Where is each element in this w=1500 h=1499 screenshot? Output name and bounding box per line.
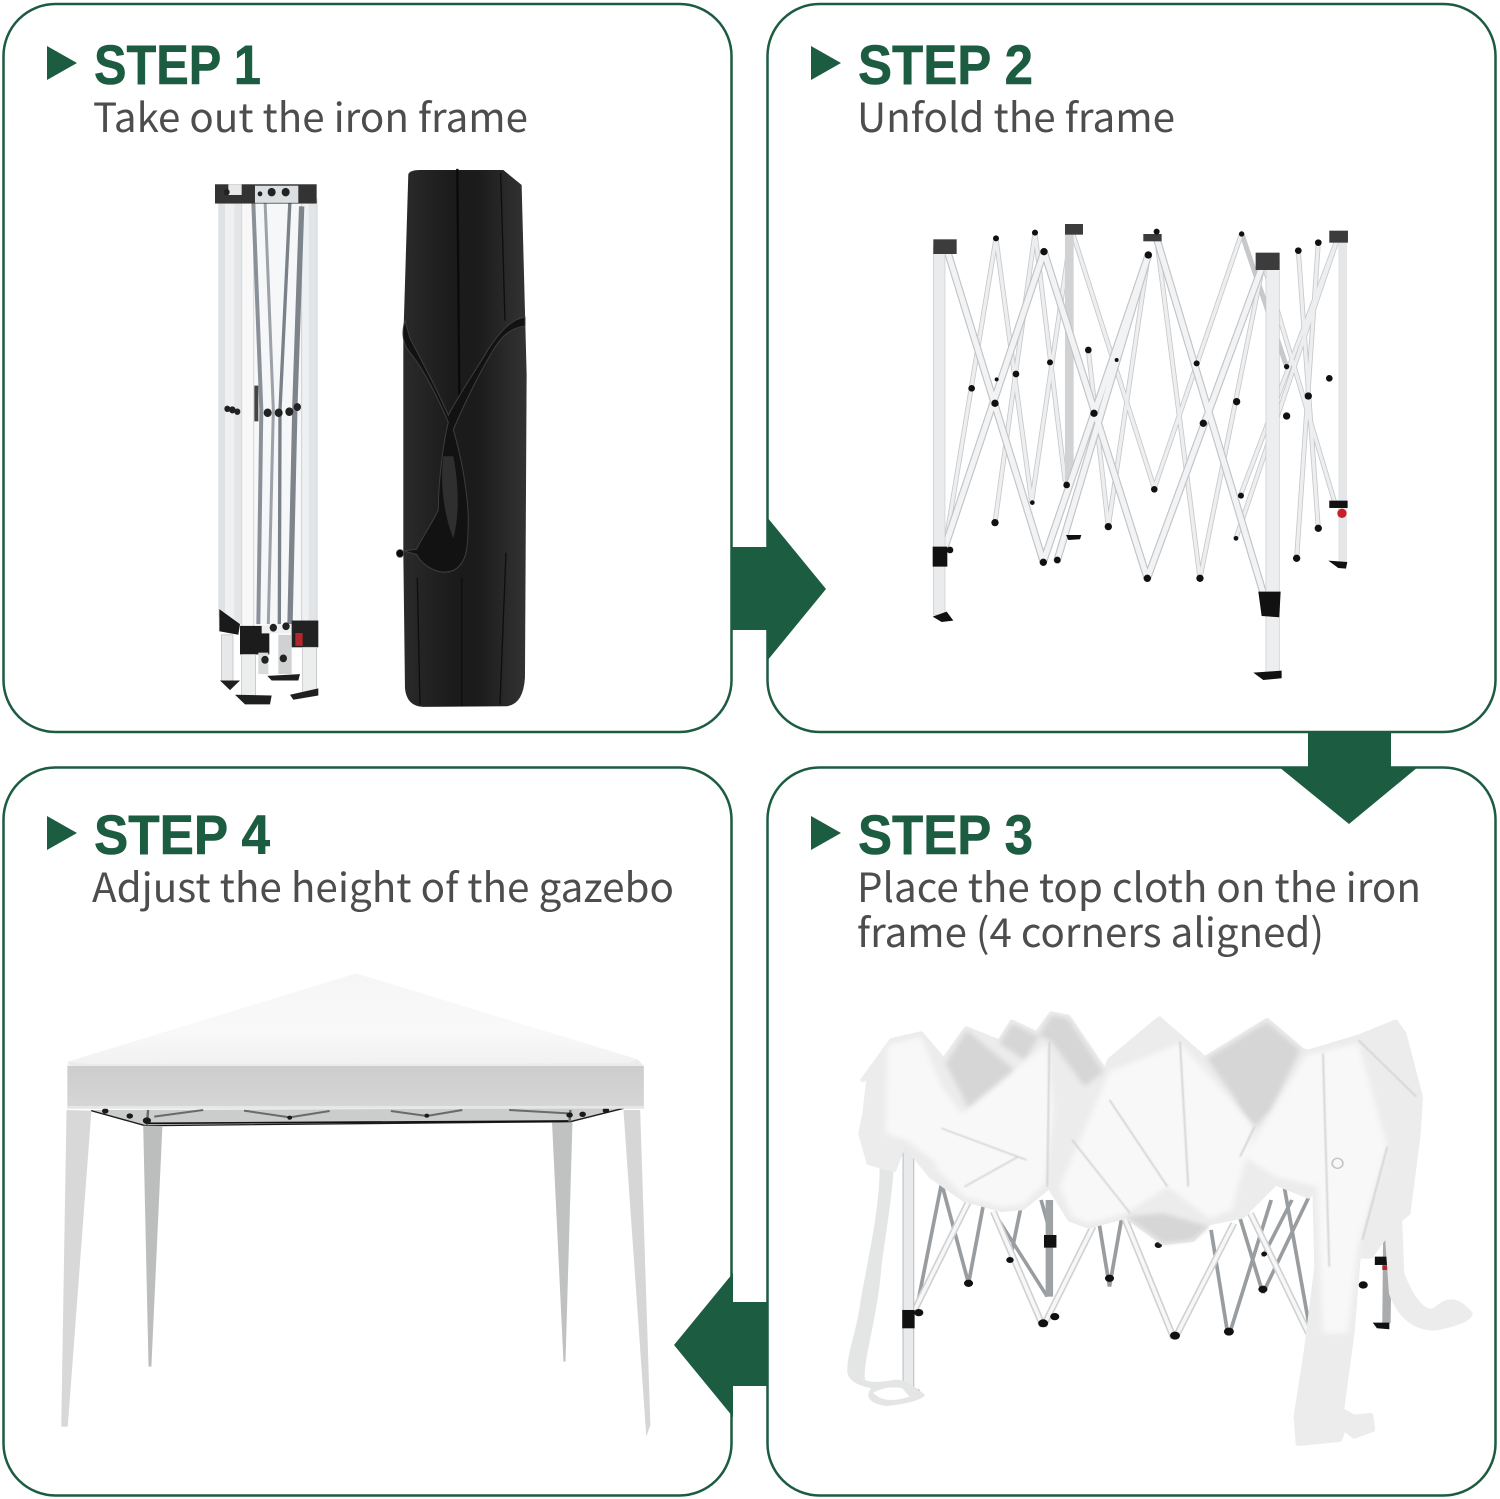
icon: step 1 triangle xyxy=(47,46,77,80)
text: step 1 instruction: Take out the iron frame xyxy=(93,86,528,144)
icon: step 3 triangle xyxy=(811,816,841,850)
text: step 3 instruction: Place the top cloth on the iron xyxy=(857,856,1421,914)
illustration: unfolded frame xyxy=(933,224,1348,680)
illustration: finished gazebo xyxy=(61,973,650,1437)
text: step 2 instruction: Unfold the frame xyxy=(857,86,1175,144)
panel: step 2 xyxy=(768,4,1496,732)
illustration: folded iron frame xyxy=(215,184,318,704)
arrow: step 3 to step 4 xyxy=(674,1273,767,1417)
heading: step 3: STEP 3 xyxy=(858,803,1033,866)
panel: step 4 xyxy=(4,768,732,1496)
icon: step 2 triangle xyxy=(811,46,841,80)
arrow: step 2 to step 3 xyxy=(1279,731,1418,824)
heading: step 2: STEP 2 xyxy=(858,33,1033,96)
arrow: step 1 to step 2 xyxy=(732,517,826,661)
illustration: cloth on frame xyxy=(847,1013,1470,1444)
text: step 3 instruction second line: frame (4 corners aligned) xyxy=(857,901,1324,959)
heading: step 4: STEP 4 xyxy=(94,803,270,866)
illustration: black carry bag xyxy=(396,169,527,707)
panel: step 1 xyxy=(4,4,732,732)
text: step 4 instruction: Adjust the height of the gazebo xyxy=(92,856,674,914)
icon: step 4 triangle xyxy=(47,816,77,850)
panel: step 3 xyxy=(768,768,1496,1496)
heading: step 1: STEP 1 xyxy=(94,33,261,96)
